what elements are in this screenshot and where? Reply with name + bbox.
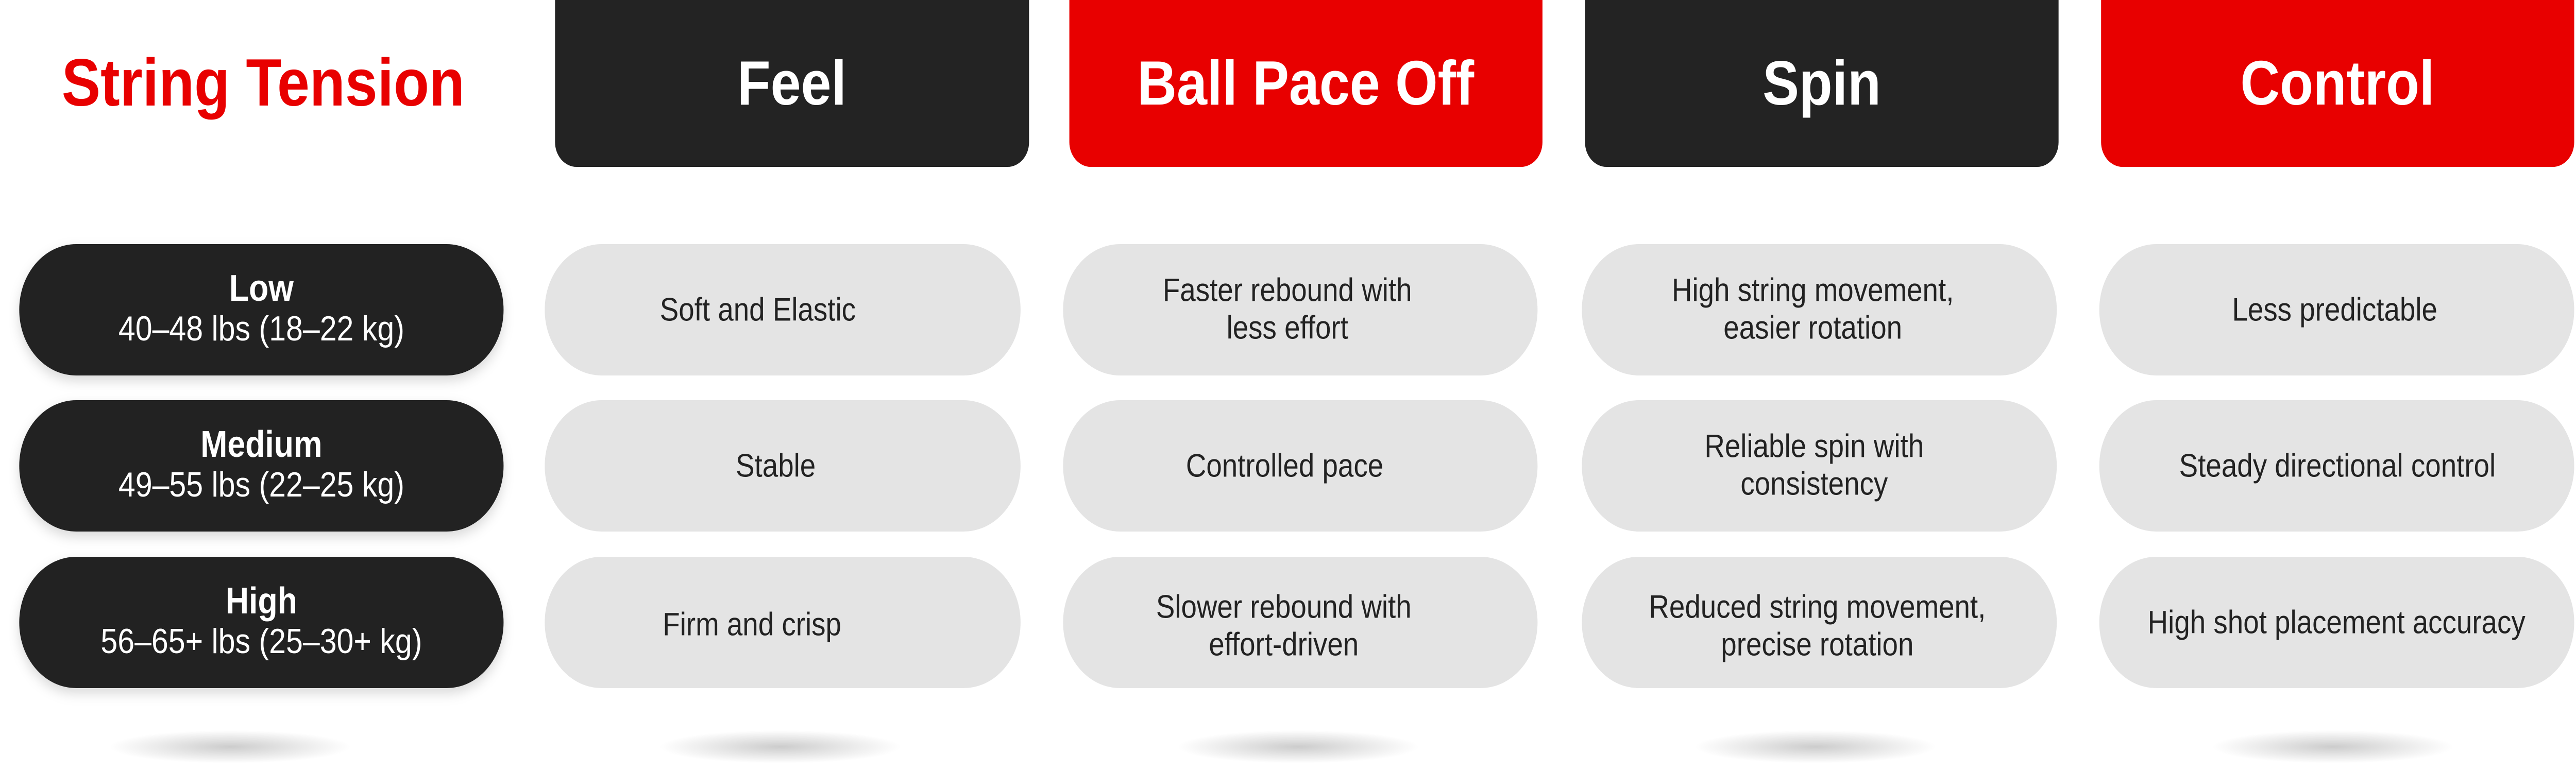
cell: control medium: [2099, 400, 2574, 532]
row label: High: 56–65+ lbs (25–30+ kg): [100, 622, 422, 661]
cell: spin medium: [1582, 400, 2057, 532]
cell: feel high: [545, 557, 1021, 688]
cell: spin medium: consistency: [1740, 466, 1888, 502]
cell: control high: High shot placement accuracy: [2148, 604, 2526, 640]
row label: Low: Low: [229, 268, 294, 309]
row label: Medium: Medium: [200, 424, 323, 465]
cell: spin high: [1582, 557, 2057, 688]
cell: pace low: Faster rebound with: [1163, 272, 1412, 308]
cell: control low: Less predictable: [2232, 292, 2437, 328]
cell: pace medium: Controlled pace: [1186, 448, 1383, 484]
cell: spin low: [1582, 244, 2057, 375]
shadow 3: [1177, 730, 1419, 763]
cell: feel low: Soft and Elastic: [660, 292, 856, 328]
row label: Medium: [19, 400, 503, 532]
cell: feel medium: [545, 400, 1021, 532]
header: Spin: [1585, 0, 2059, 167]
header: Feel: [555, 0, 1029, 167]
header: Ball Pace Off: Ball Pace Off: [1137, 48, 1475, 118]
row label: Low: 40–48 lbs (18–22 kg): [118, 309, 404, 348]
cell: pace high: Slower rebound with: [1156, 589, 1412, 625]
cell: spin low: High string movement,: [1672, 272, 1954, 308]
shadow 5: [2212, 730, 2454, 763]
header: Feel: Feel: [737, 48, 846, 118]
cell: feel medium: Stable: [736, 448, 816, 484]
row label: Low: [19, 244, 503, 375]
cell: control medium: Steady directional control: [2179, 448, 2496, 484]
cell: feel high: Firm and crisp: [663, 606, 841, 642]
row label: High: High: [226, 580, 297, 622]
cell: pace high: [1063, 557, 1537, 688]
cell: spin high: precise rotation: [1721, 626, 1913, 662]
row label: Medium: 49–55 lbs (22–25 kg): [118, 465, 404, 504]
cell: spin high: Reduced string movement,: [1649, 589, 1986, 625]
cell: pace low: [1063, 244, 1537, 375]
shadow 2: [659, 730, 901, 763]
header: Spin: Spin: [1762, 48, 1881, 118]
shadow 1: [109, 730, 351, 763]
cell: spin low: easier rotation: [1723, 310, 1902, 346]
header: Control: [2101, 0, 2574, 167]
cell: feel low: [545, 244, 1021, 375]
header: Control: Control: [2241, 48, 2434, 118]
cell: pace medium: [1063, 400, 1537, 532]
cell: control high: [2099, 557, 2574, 688]
header: Ball Pace Off: [1070, 0, 1543, 167]
shadow 4: [1694, 730, 1936, 763]
title: String Tension: [62, 45, 465, 120]
cell: pace high: effort-driven: [1209, 626, 1359, 662]
cell: pace low: less effort: [1227, 310, 1348, 346]
cell: spin medium: Reliable spin with: [1704, 428, 1924, 464]
row label: High: [19, 557, 503, 688]
cell: control low: [2099, 244, 2574, 375]
